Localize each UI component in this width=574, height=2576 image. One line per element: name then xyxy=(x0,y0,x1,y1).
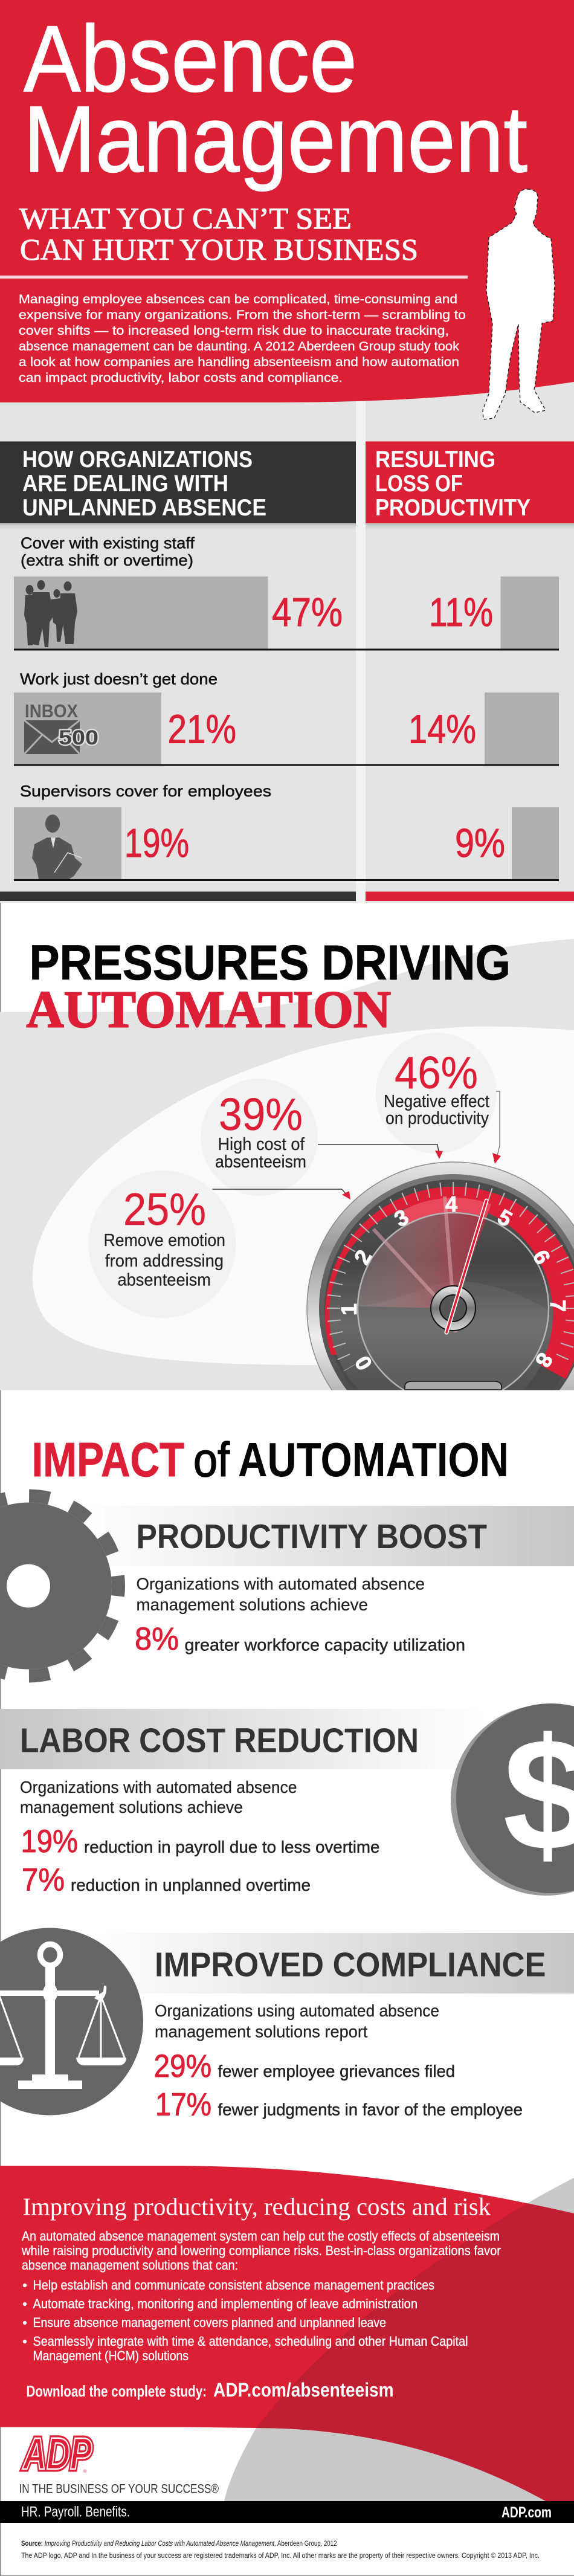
dial numbers: 2 xyxy=(349,1245,376,1268)
row: work just doesn't get done xyxy=(14,670,559,766)
callout: 46% xyxy=(376,1033,497,1154)
callout: 46%: Negative effect xyxy=(384,1092,489,1111)
icon: supervisor xyxy=(32,815,82,879)
panel: impact of automation xyxy=(0,1433,574,2122)
title xyxy=(24,7,527,192)
callout: 46%: 46% xyxy=(395,1047,478,1098)
heading: resulting loss of productivity: RESULTING xyxy=(375,447,495,473)
title: IMPACT xyxy=(31,1433,184,1487)
needle xyxy=(447,1201,486,1332)
needle sweep xyxy=(358,1212,486,1308)
section: improved compliance xyxy=(0,1928,574,2122)
row: supervisors cover for employees: Supervisors cover for employees xyxy=(20,782,271,800)
intro text: expensive for many organizations. From the short-term — scrambling to xyxy=(19,308,466,322)
heading: resulting loss of productivity: LOSS OF xyxy=(375,471,463,497)
source and legal text: The ADP logo, ADP and In the business of your success are registered trademarks of ADP, Inc. All other marks are the property of their respective owners. Copyright © 2013 ADP, Inc. xyxy=(21,2552,540,2560)
stat: 8%: 8% xyxy=(135,1621,179,1657)
gauge xyxy=(306,1161,574,1390)
bottom plate xyxy=(405,1381,501,1390)
callout: 39%: absenteeism xyxy=(215,1152,306,1172)
bullet list: Automate tracking, monitoring and implementing of leave administration xyxy=(33,2296,418,2311)
stat: 17%: 17% xyxy=(155,2087,211,2122)
stat: 29%: 29% xyxy=(153,2048,211,2084)
description: management solutions report xyxy=(155,2022,368,2041)
callout: 25%: from addressing xyxy=(105,1251,224,1271)
intro text: a look at how companies are handling absenteeism and how automation xyxy=(19,355,459,369)
arrow: 39% to gauge xyxy=(318,1144,443,1159)
icon: gear xyxy=(0,1496,118,1676)
panel: closing summary xyxy=(0,2166,574,2501)
callout: 39%: 39% xyxy=(219,1089,303,1140)
call to action: Download the complete study: xyxy=(27,2382,207,2400)
lower face highlight xyxy=(358,1281,550,1390)
row: supervisors cover for employees xyxy=(14,782,559,881)
heading: how organizations: ARE DEALING WITH xyxy=(22,471,228,497)
bullet list: Management (HCM) solutions xyxy=(33,2348,189,2363)
callout: 39%: High cost of xyxy=(218,1135,305,1154)
ADP logo: ADP xyxy=(22,2429,92,2479)
ghost needles xyxy=(373,1196,459,1332)
panel: pressures driving automation xyxy=(0,939,574,1390)
stat: 7%: reduction in unplanned overtime xyxy=(71,1876,311,1894)
stat: 29% xyxy=(153,2048,455,2084)
stat: 29%: fewer employee grievances filed xyxy=(218,2062,455,2080)
page edge line xyxy=(0,901,1,2576)
title: PRESSURES DRIVING xyxy=(29,935,511,990)
stat: 19% xyxy=(21,1824,379,1859)
icon: inbox envelope: INBOX xyxy=(25,700,78,721)
heading: how organizations xyxy=(0,441,356,532)
intro text: Managing employee absences can be complicated, time-consuming and xyxy=(19,292,457,306)
icon: inbox envelope: 500 xyxy=(59,726,98,749)
title xyxy=(27,935,511,1038)
intro text: cover shifts — to increased long-term risk due to inaccurate tracking, xyxy=(19,323,449,338)
body text: absence management solutions that can: xyxy=(22,2258,238,2273)
bullet list: Seamlessly integrate with time & attendance, scheduling and other Human Capital xyxy=(33,2334,468,2349)
subtitle xyxy=(19,201,418,266)
description xyxy=(20,1778,297,1816)
arrow: 46% to gauge xyxy=(492,1091,501,1164)
description: management solutions achieve xyxy=(137,1595,368,1614)
title: AUTOMATION xyxy=(238,1433,509,1487)
intro text: can impact productivity, labor costs and compliance. xyxy=(19,370,343,385)
bullet list: Ensure absence management covers planned and unplanned leave xyxy=(33,2315,386,2330)
title: AUTOMATION xyxy=(27,980,391,1038)
callout: 25% xyxy=(88,1170,236,1318)
callout: 25%: absenteeism xyxy=(117,1270,211,1290)
title: of xyxy=(193,1433,230,1487)
row: cover with existing staff xyxy=(14,534,559,650)
callout: 25%: Remove emotion xyxy=(104,1231,225,1250)
call to action xyxy=(27,2379,394,2401)
bullet list: Help establish and communicate consistent absence management practices xyxy=(33,2277,434,2293)
stat: 17% xyxy=(155,2087,523,2122)
heading: Improving productivity, reducing costs and risk xyxy=(23,2192,491,2220)
dial numbers: 6 xyxy=(528,1245,555,1268)
intro text xyxy=(19,292,466,385)
stat: 8%: greater workforce capacity utilization xyxy=(185,1635,465,1654)
description: management solutions achieve xyxy=(20,1798,243,1816)
stat: 19%: 19% xyxy=(21,1824,78,1859)
section: productivity boost xyxy=(0,1496,574,1676)
row: work just doesn't get done: Work just doesn’t get done xyxy=(20,670,218,688)
dial numbers: 1 xyxy=(337,1303,361,1315)
value: 21%: 21% xyxy=(168,707,236,752)
heading: LABOR COST REDUCTION xyxy=(20,1721,419,1760)
dial numbers: 0 xyxy=(350,1352,377,1375)
icon: dollar coin xyxy=(451,1703,574,1896)
footer bar: HR. Payroll. Benefits. xyxy=(21,2504,130,2520)
section: labor cost reduction xyxy=(0,1703,574,1897)
title: Management xyxy=(24,87,527,192)
outer chrome ring xyxy=(306,1161,574,1390)
row: cover with existing staff: (extra shift or overtime) xyxy=(21,551,193,569)
bullet list xyxy=(23,2277,468,2363)
body text: while raising productivity and lowering compliance risks. Best-in-class organizations favor xyxy=(21,2243,501,2258)
row: cover with existing staff: Cover with existing staff xyxy=(21,534,195,552)
arrow: 25% to gauge xyxy=(213,1189,350,1199)
source and legal text xyxy=(21,2540,540,2560)
icon: group of staff xyxy=(24,580,77,647)
value: 14%: 14% xyxy=(408,707,476,752)
heading: resulting loss of productivity xyxy=(366,441,574,532)
icon: scales of justice xyxy=(0,1928,143,2115)
title xyxy=(31,1433,509,1487)
footer bar: ADP.com xyxy=(501,2504,552,2521)
title: Absence xyxy=(24,7,357,112)
subtitle: WHAT YOU CAN’T SEE xyxy=(19,201,352,235)
value: 19%: 19% xyxy=(124,821,189,866)
hub xyxy=(431,1286,476,1331)
dial numbers: 5 xyxy=(494,1204,517,1232)
description: Organizations with automated absence xyxy=(20,1778,297,1796)
heading: IMPROVED COMPLIANCE xyxy=(155,1946,546,1984)
heading: resulting loss of productivity: PRODUCTIVITY xyxy=(375,495,530,521)
panel: header xyxy=(0,0,574,419)
dial numbers: 8 xyxy=(530,1349,558,1372)
icon: dashed silhouette of absent employee xyxy=(483,189,555,419)
dial numbers xyxy=(337,1192,570,1375)
callout: 46%: on productivity xyxy=(385,1109,489,1128)
stat: 7%: 7% xyxy=(22,1862,65,1897)
panel: grey column area xyxy=(0,363,574,903)
description xyxy=(155,2001,439,2041)
heading: how organizations: UNPLANNED ABSENCE xyxy=(22,495,266,521)
value: 9%: 9% xyxy=(455,821,505,866)
body text xyxy=(21,2229,501,2273)
source and legal text: Source: Improving Productivity and Reducing Labor Costs with Automated Absence Management, Aberdeen Group, 2012 xyxy=(21,2540,337,2548)
tick marks xyxy=(327,1182,574,1372)
callout: 39% xyxy=(201,1079,318,1196)
description: Organizations using automated absence xyxy=(155,2001,439,2020)
intro text: absence management can be daunting. A 2012 Aberdeen Group study took xyxy=(19,339,459,353)
ADP logo: ADP xyxy=(22,2429,92,2479)
dial numbers: 3 xyxy=(390,1204,413,1232)
heading: how organizations: HOW ORGANIZATIONS xyxy=(22,447,253,473)
tagline: IN THE BUSINESS OF YOUR SUCCESS® xyxy=(19,2482,219,2496)
stat: 17%: fewer judgments in favor of the employee xyxy=(218,2100,523,2119)
value: 47%: 47% xyxy=(272,590,343,635)
panel: how organizations are dealing with unplanned absence xyxy=(0,441,574,901)
body text: An automated absence management system can help cut the costly effects of absenteeism xyxy=(22,2229,500,2244)
footer bar xyxy=(0,2501,574,2523)
dial numbers: 7 xyxy=(546,1300,570,1312)
subtitle: CAN HURT YOUR BUSINESS xyxy=(20,232,418,266)
icon: inbox envelope xyxy=(24,700,98,754)
stat: 8% xyxy=(135,1621,465,1657)
value: 11%: 11% xyxy=(429,590,493,635)
callout: 25%: 25% xyxy=(123,1184,206,1235)
heading: PRODUCTIVITY BOOST xyxy=(137,1517,487,1556)
call to action: ADP.com/absenteeism xyxy=(213,2379,394,2401)
stat: 19%: reduction in payroll due to less overtime xyxy=(84,1838,379,1856)
ADP logo: ® xyxy=(83,2469,87,2474)
red zone xyxy=(325,1187,574,1379)
dial numbers: 4 xyxy=(445,1192,457,1216)
description: Organizations with automated absence xyxy=(137,1575,425,1593)
description xyxy=(137,1575,425,1614)
stat: 7% xyxy=(22,1862,311,1897)
